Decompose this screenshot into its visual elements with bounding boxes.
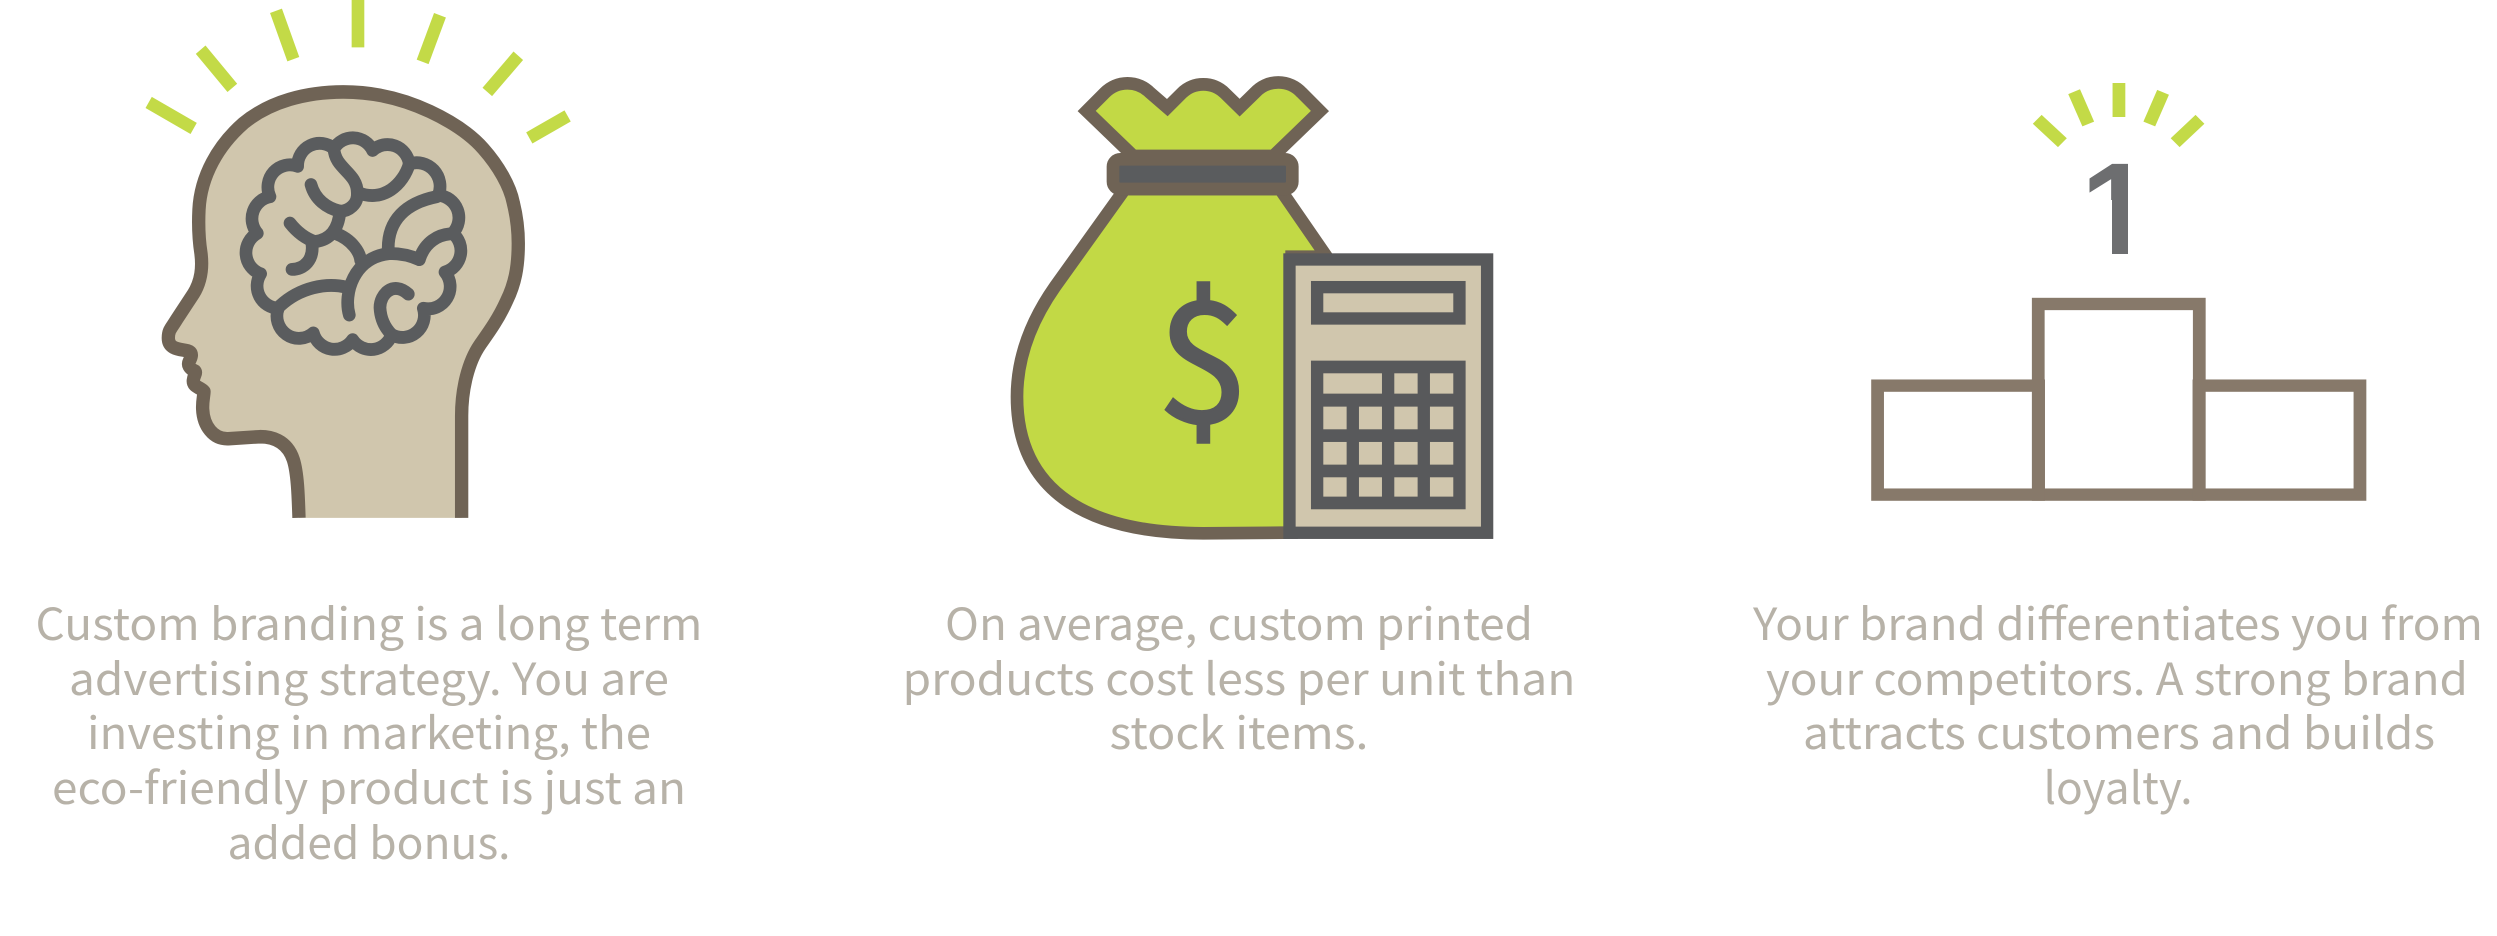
text: differentiation description: loyalty. xyxy=(2044,753,2192,817)
icon: money bag and calculator xyxy=(1017,82,1487,533)
brain outline xyxy=(246,138,461,350)
text: branding description: investing in marketing, the xyxy=(87,698,651,762)
money bag body xyxy=(1017,189,1327,533)
text: differentiation description xyxy=(1752,589,2483,817)
text: branding description xyxy=(36,589,703,872)
icon: winner podium xyxy=(1878,83,2360,495)
text: differentiation description: attracts customers and builds xyxy=(1803,698,2435,762)
panel: lower cost xyxy=(902,82,1576,762)
text: differentiation description: your competitors. A strong brand xyxy=(1766,644,2468,708)
text: cost description xyxy=(902,589,1576,762)
celebration rays xyxy=(2037,83,2200,143)
bag tie xyxy=(1113,159,1292,189)
text: cost description: On average, custom printed xyxy=(945,589,1533,653)
text: branding description: eco-friendly product is just an xyxy=(52,753,686,817)
head silhouette xyxy=(168,92,518,518)
dollar sign: $ xyxy=(1156,229,1249,470)
money bag top xyxy=(1087,82,1320,156)
icon: head with brain xyxy=(149,0,568,518)
text: cost description: products cost less per unit than xyxy=(902,644,1576,708)
idea rays xyxy=(149,0,568,138)
panel: brand differentiation xyxy=(1752,83,2483,817)
text: cost description: stock items. xyxy=(1110,698,1368,762)
text: differentiation description: Your brand differentiates you from xyxy=(1752,589,2483,653)
text: branding description: added bonus. xyxy=(228,808,510,872)
text: branding description: advertising strategy. You are xyxy=(69,644,669,708)
calculator xyxy=(1289,259,1487,533)
text: branding description: Custom branding is a long term xyxy=(36,589,703,653)
podium blocks xyxy=(1878,304,2360,495)
panel: long term strategy xyxy=(36,0,703,872)
number one: 1 xyxy=(2081,135,2153,282)
